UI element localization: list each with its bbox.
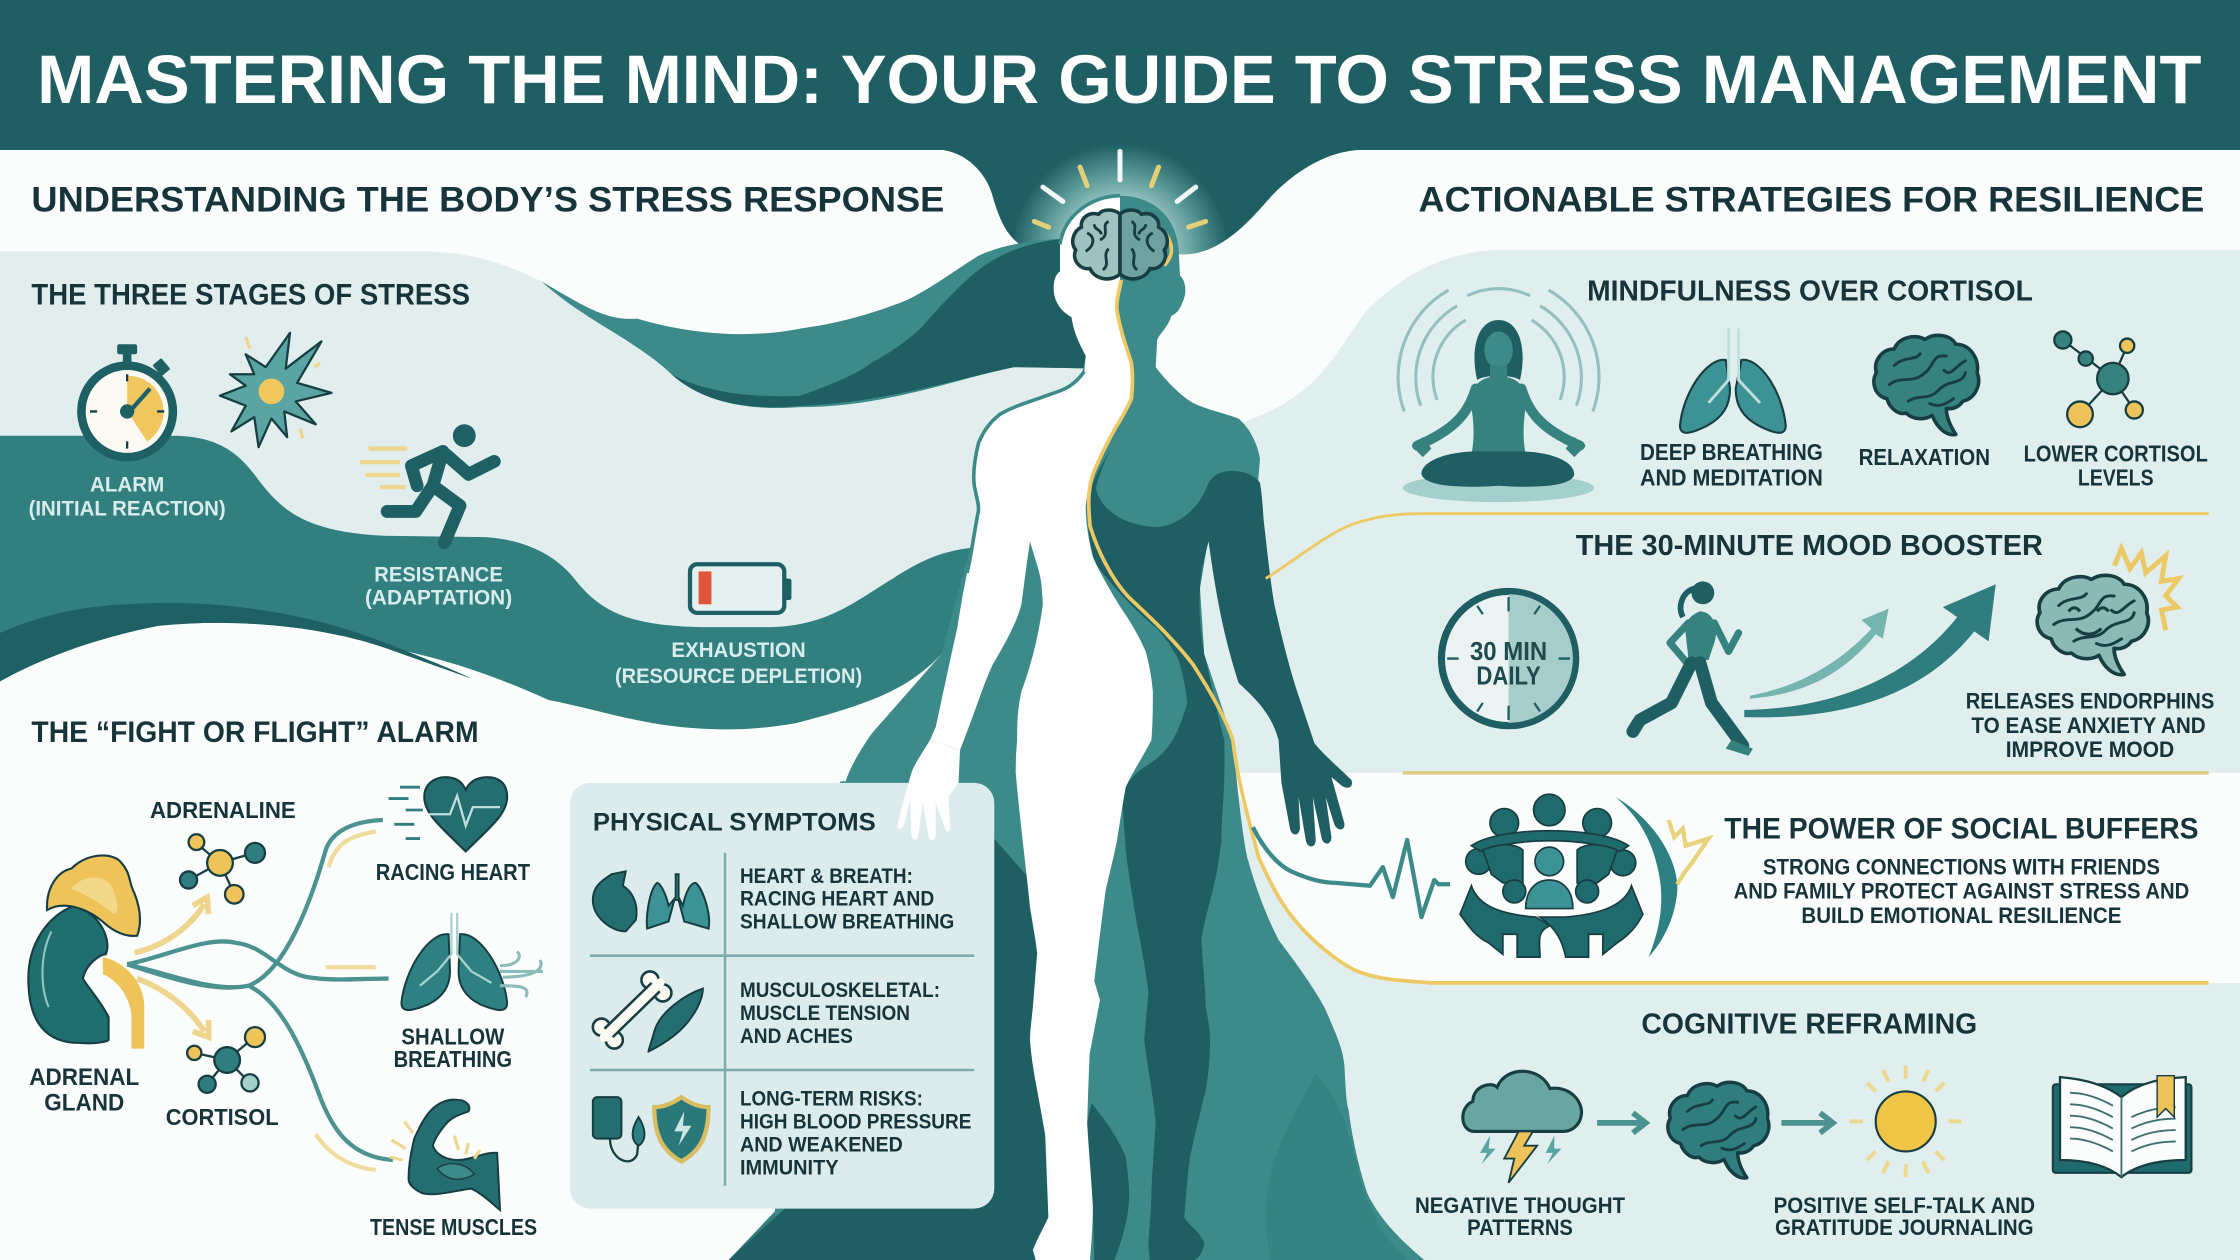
heading: three stages: THE THREE STAGES OF STRESS: [31, 278, 470, 311]
wave band: three stages path: [0, 436, 1029, 1260]
yellow divider above social panel: [1403, 772, 2209, 774]
body lower calf shading: [1087, 1103, 1129, 1260]
label: tense muscles: TENSE MUSCLES: [370, 1214, 537, 1240]
icon: running woman: [1633, 581, 1753, 756]
panel: physical symptoms: [570, 783, 994, 1209]
icon: happy brain: [2037, 549, 2179, 675]
text: endorphins: RELEASES ENDORPHINS: [1966, 689, 2214, 714]
panel: social buffers: [1460, 794, 2199, 957]
label: alarm: ALARM: [90, 472, 164, 496]
text: endorphins: IMPROVE MOOD: [2006, 737, 2174, 762]
arrow: to adrenaline: [134, 897, 209, 953]
icon: storm cloud: [1463, 1071, 1582, 1183]
panel: three stages of stress: [29, 278, 862, 688]
ribbon: flowing hair light: [541, 239, 1100, 408]
icon: low battery: [690, 564, 791, 613]
text: long-term risks: AND WEAKENED: [740, 1132, 903, 1156]
icon: cortisol molecule: [187, 1027, 265, 1093]
panel: stages background: [0, 251, 1086, 671]
signal pathways: [127, 820, 393, 1160]
label: relaxation: RELAXATION: [1859, 444, 1990, 470]
icon: head brain: [1073, 210, 1167, 279]
heading: fight or flight: THE “FIGHT OR FLIGHT” ALARM: [31, 716, 479, 749]
icon: immunity shield: [654, 1097, 709, 1161]
lower left teal drape: [771, 529, 1050, 1260]
heading: mood booster: THE 30-MINUTE MOOD BOOSTER: [1576, 530, 2043, 562]
panel: mindfulness over cortisol: [1398, 276, 2208, 502]
body white left hand over panel: [897, 740, 960, 840]
panel: cognitive reframing: [1415, 1008, 2191, 1240]
label: positive self-talk: POSITIVE SELF-TALK AND: [1774, 1193, 2035, 1218]
icon: open journal: [2053, 1076, 2191, 1177]
icon: adrenal gland: [28, 855, 144, 1049]
ribbon: flowing hair dark: [671, 239, 1100, 407]
text: heart and breath: RACING HEART AND: [740, 887, 934, 911]
icon: adrenaline molecule: [180, 834, 265, 904]
text: musculoskeletal: MUSCLE TENSION: [740, 1001, 910, 1025]
icon: supportive group: [1460, 794, 1643, 957]
heading: social buffers: THE POWER OF SOCIAL BUFFERS: [1724, 813, 2199, 846]
title: MASTERING THE MIND: YOUR GUIDE TO STRESS MANAGEMENT: [37, 41, 2202, 118]
icon: racing heart: [389, 777, 507, 851]
heading: mindfulness: MINDFULNESS OVER CORTISOL: [1587, 276, 2033, 308]
icon: lungs: [1680, 329, 1786, 433]
icon: tense muscle arm: [390, 1100, 500, 1210]
text: social body: STRONG CONNECTIONS WITH FRIENDS: [1763, 854, 2160, 879]
yellow divider curve between strategies: [1266, 514, 2209, 579]
panel: social buffers background: [1233, 773, 2240, 983]
white wedge beside band: [771, 654, 941, 781]
label: alarm: (INITIAL REACTION): [29, 497, 226, 521]
arrow: small mood rising: [1750, 609, 1889, 699]
label: adrenal gland: GLAND: [44, 1090, 124, 1117]
clock text: 30 MIN: [1470, 638, 1547, 666]
panel: strategies background: [1193, 250, 2240, 1260]
label: shallow breathing: BREATHING: [394, 1046, 512, 1072]
text: social body: BUILD EMOTIONAL RESILIENCE: [1801, 903, 2121, 928]
icon: meditating figure: [1398, 289, 1599, 502]
body dark torso, arm and leg: [1088, 443, 1352, 1260]
label: cortisol: CORTISOL: [166, 1104, 279, 1130]
arrow: large mood rising: [1744, 584, 1996, 717]
text: endorphins: TO EASE ANXIETY AND: [1971, 713, 2206, 738]
icon: lungs with breath: [401, 913, 543, 1010]
text: musculoskeletal: AND ACHES: [740, 1024, 853, 1048]
faint yellow accents: [316, 831, 376, 1170]
label: adrenal gland: ADRENAL: [29, 1064, 139, 1091]
icon: protective arc: [1616, 797, 1677, 957]
lower left dark drape: [729, 837, 1050, 1260]
icon: lower cortisol molecule: [2054, 331, 2143, 427]
icon: yellow spark: [1669, 820, 1709, 884]
panel: mood booster: [1441, 530, 2214, 762]
label: racing heart: RACING HEART: [376, 859, 530, 885]
head hump with glow: [914, 143, 1360, 254]
yellow nerve line: [1089, 211, 2209, 983]
arrow: cloud to brain: [1597, 1113, 1646, 1133]
label: negative thought: PATTERNS: [1467, 1215, 1573, 1240]
body right half and drape: [1000, 196, 1424, 1260]
label: exhaustion: EXHAUSTION: [671, 638, 806, 662]
header banner: [0, 0, 2240, 150]
label: resistance: (ADAPTATION): [365, 585, 512, 609]
icon: stopwatch: [81, 344, 173, 457]
drape shading: [1266, 1073, 1407, 1260]
icon: anatomical heart: [593, 871, 637, 931]
label: lower cortisol: LOWER CORTISOL: [2024, 440, 2208, 466]
label: resistance: RESISTANCE: [374, 562, 503, 586]
wave band: dark lower ribbon: [0, 603, 471, 681]
icon: head rays: [1034, 151, 1206, 227]
body outline left shoulder: [967, 196, 1120, 573]
label: shallow breathing: SHALLOW: [401, 1023, 505, 1049]
panel: fight or flight alarm: [28, 716, 543, 1240]
icon: 30 minute clock: [1441, 591, 1576, 726]
icon: blood pressure cuff: [593, 1097, 644, 1161]
icon: relaxed brain: [1874, 335, 1979, 435]
section heading: stress response: UNDERSTANDING THE BODY’S STRESS RESPONSE: [31, 180, 944, 219]
ECG line from hand: [1253, 827, 1450, 917]
text: heart and breath: HEART & BREATH:: [740, 864, 913, 888]
label: lower cortisol: LEVELS: [2078, 465, 2154, 491]
arrow: brain to sun: [1781, 1113, 1833, 1133]
label: deep breathing: AND MEDITATION: [1640, 465, 1823, 491]
arrow: to cortisol: [137, 979, 209, 1037]
icon: muscle fiber: [649, 989, 703, 1051]
text: heart and breath: SHALLOW BREATHING: [740, 910, 954, 934]
body left white half: [930, 196, 1153, 1260]
clock text: DAILY: [1476, 662, 1541, 690]
icon: reframing brain: [1668, 1082, 1769, 1178]
text: long-term risks: HIGH BLOOD PRESSURE: [740, 1110, 971, 1134]
icon: runner: [360, 424, 494, 543]
label: adrenaline: ADRENALINE: [150, 797, 296, 823]
text: long-term risks: LONG-TERM RISKS:: [740, 1087, 923, 1111]
text: long-term risks: IMMUNITY: [740, 1155, 839, 1179]
text: social body: AND FAMILY PROTECT AGAINST STRESS AND: [1734, 879, 2189, 904]
heading: cognitive reframing: COGNITIVE REFRAMING: [1641, 1008, 1977, 1040]
icon: starburst: [220, 333, 331, 447]
label: positive self-talk: GRATITUDE JOURNALING: [1775, 1215, 2034, 1240]
icon: sun: [1850, 1066, 1961, 1177]
label: deep breathing: DEEP BREATHING: [1640, 439, 1823, 465]
text: musculoskeletal: MUSCULOSKELETAL:: [740, 978, 940, 1002]
icon: bone: [593, 971, 671, 1049]
icon: lungs small: [647, 874, 709, 929]
label: negative thought: NEGATIVE THOUGHT: [1415, 1193, 1625, 1218]
label: exhaustion: (RESOURCE DEPLETION): [615, 664, 862, 688]
heading: physical symptoms: PHYSICAL SYMPTOMS: [593, 809, 876, 837]
section heading: resilience strategies: ACTIONABLE STRATEGIES FOR RESILIENCE: [1419, 180, 2204, 219]
